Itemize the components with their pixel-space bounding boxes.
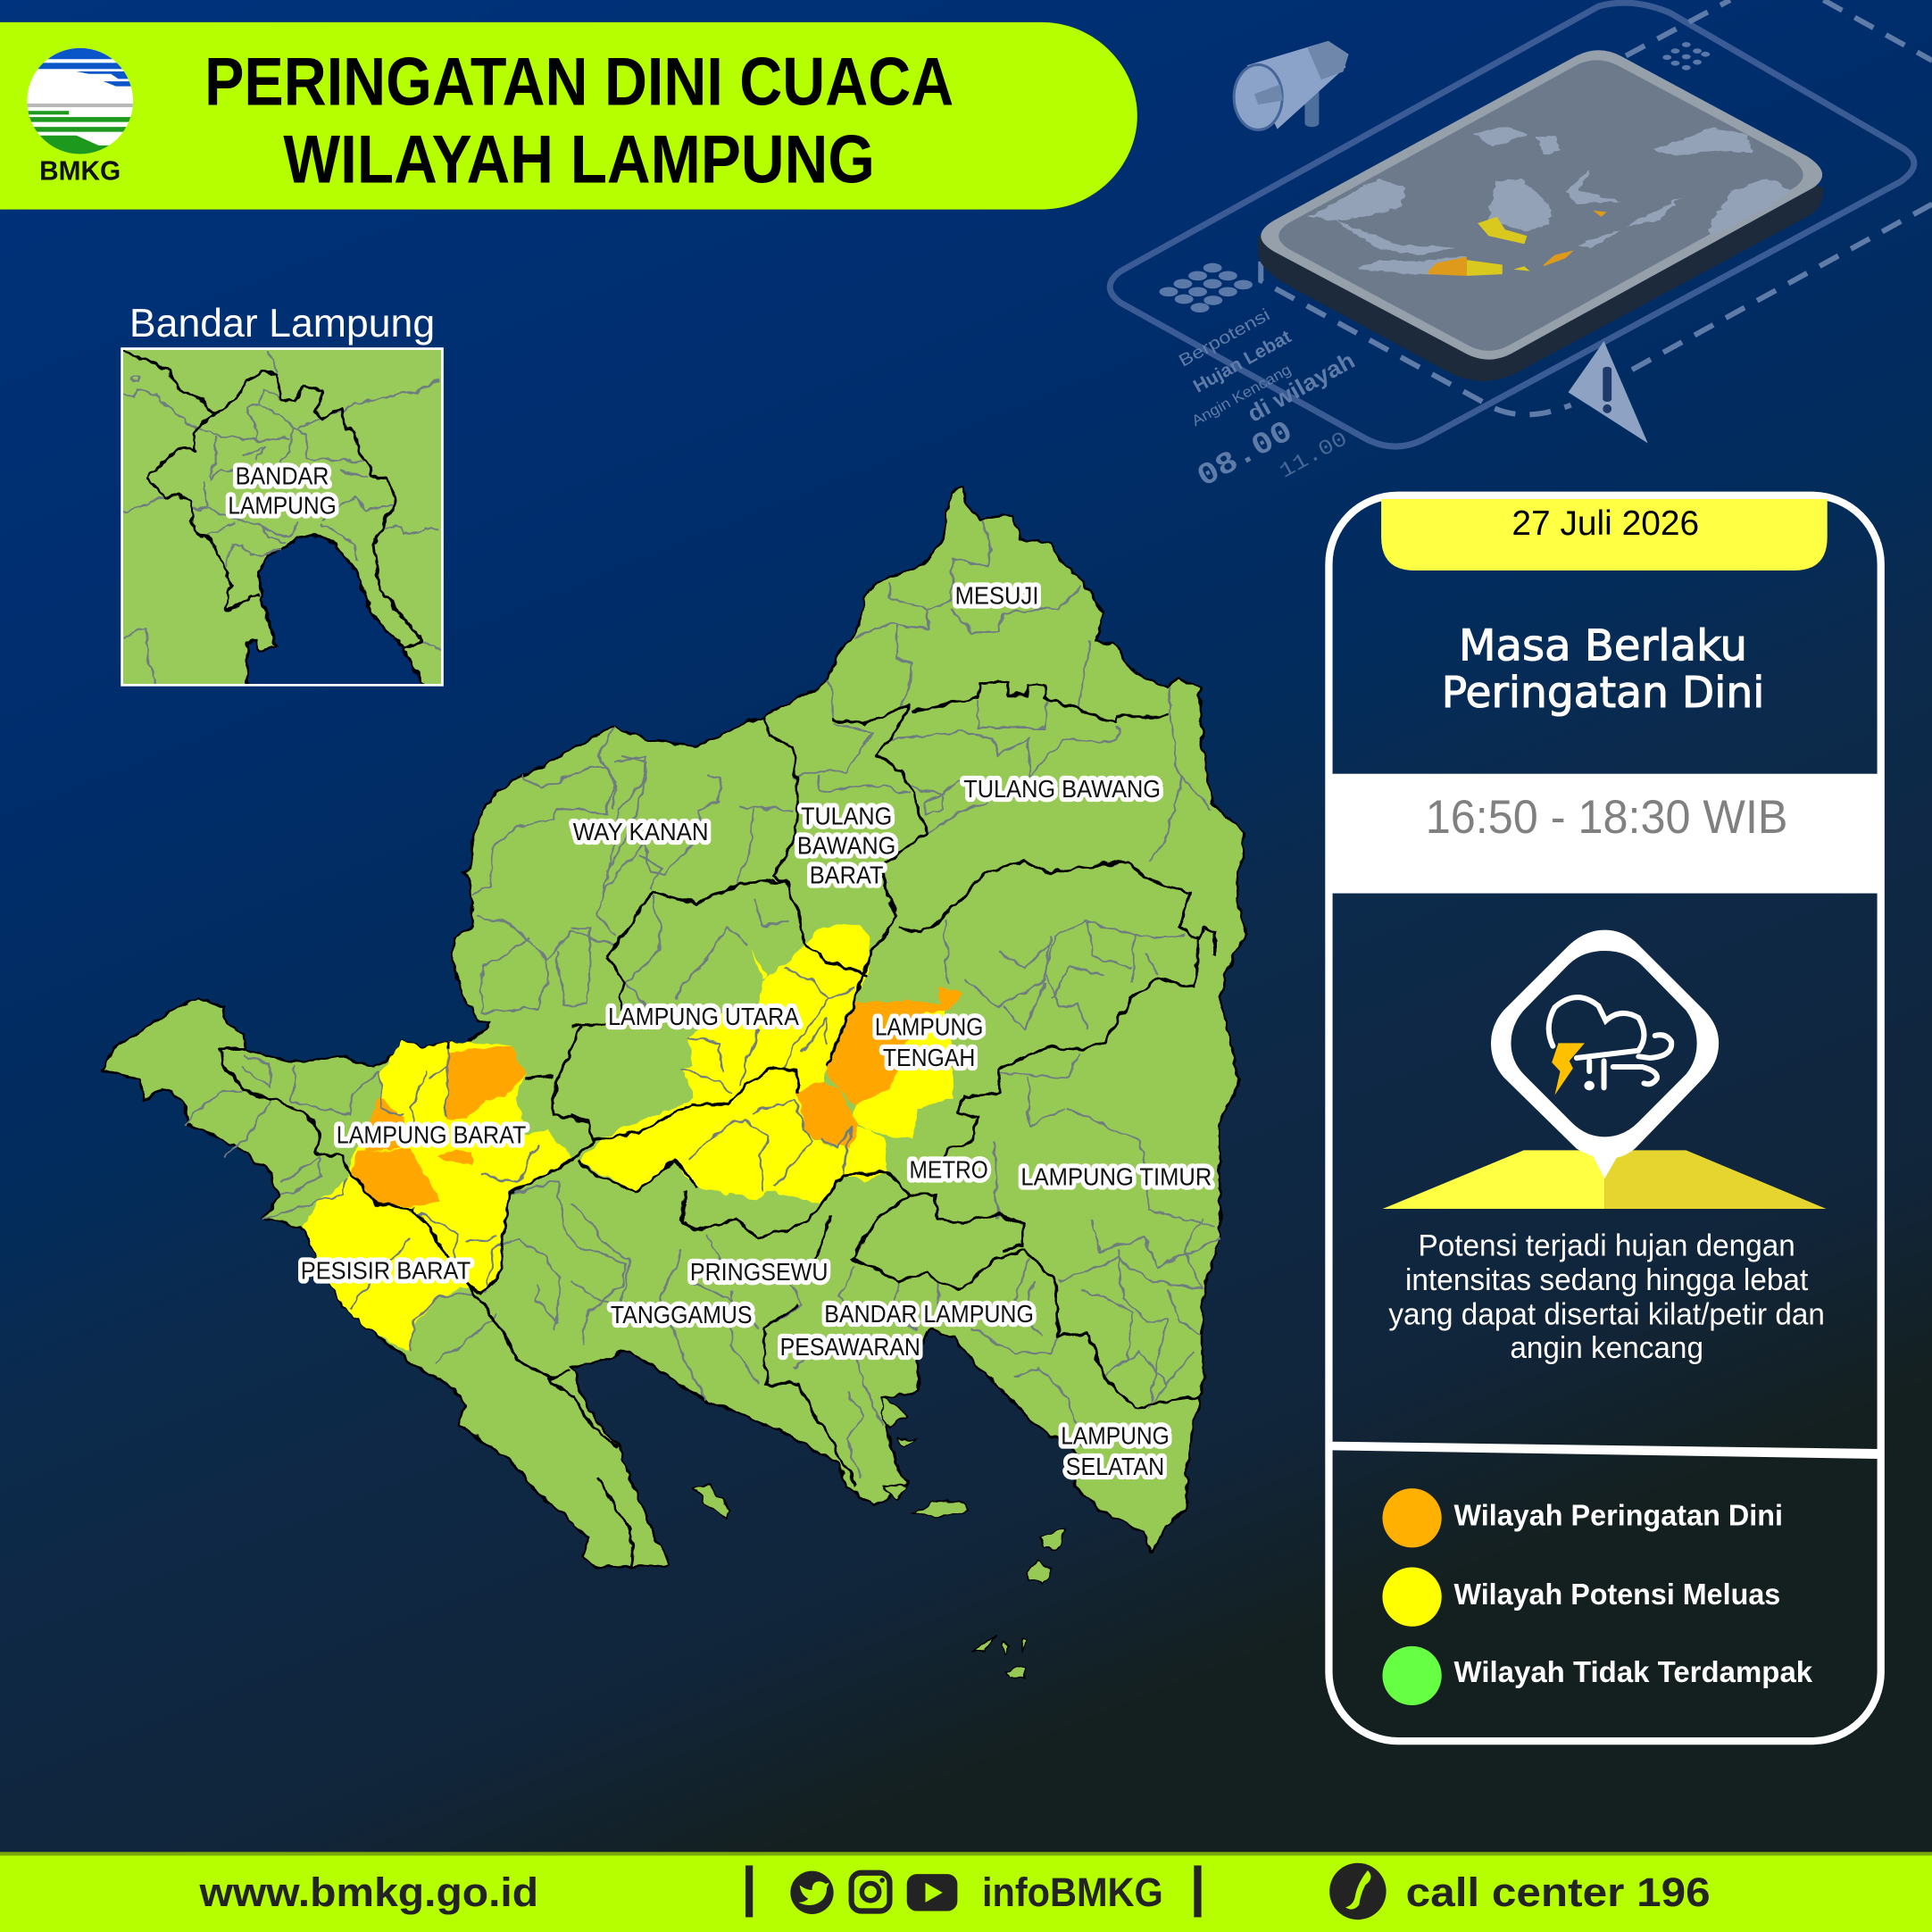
islands — [694, 1399, 1064, 1678]
icon: youtube — [907, 1874, 957, 1911]
inset sea — [245, 533, 425, 684]
validity heading: Masa Berlaku — [1459, 621, 1747, 671]
validity heading: Peringatan Dini — [1442, 668, 1764, 718]
social handle: infoBMKG — [982, 1870, 1163, 1915]
isometric background text: 11.00 — [1276, 428, 1352, 484]
isometric background text — [1176, 305, 1359, 495]
region labels: PESISIR BARAT — [301, 1257, 471, 1285]
region labels: LAMPUNG — [1061, 1421, 1170, 1449]
inset label: LAMPUNG — [228, 492, 337, 520]
sub-district lines east — [571, 520, 1220, 1486]
title: WILAYAH LAMPUNG — [283, 121, 875, 197]
region labels: LAMPUNG — [875, 1012, 983, 1040]
background illustration: tablet with map — [1110, 0, 1932, 446]
legend — [1382, 1488, 1813, 1705]
region labels: SELATAN — [1066, 1453, 1164, 1480]
map geography — [101, 487, 1247, 1678]
title: PERINGATAN DINI CUACA — [204, 44, 954, 120]
icon: weather pin on yellow base — [1383, 930, 1827, 1209]
dashed frame — [1261, 0, 1932, 414]
icon: phone — [1329, 1863, 1387, 1920]
icon: megaphone — [1234, 41, 1349, 129]
legend: Wilayah Peringatan Dini — [1454, 1500, 1783, 1533]
screen map highlighted areas — [1428, 211, 1607, 276]
region labels: TANGGAMUS — [611, 1301, 753, 1328]
region labels: PRINGSEWU — [690, 1258, 828, 1286]
logo: BMKG — [25, 46, 136, 186]
validity time band: 16:50 - 18:30 WIB — [1426, 792, 1788, 844]
description text: intensitas sedang hingga lebat — [1405, 1263, 1809, 1297]
tablet base — [1258, 96, 1824, 381]
region labels: METRO — [910, 1155, 988, 1183]
icon: warning triangle — [1569, 341, 1648, 443]
sub-district and regency lines west — [185, 756, 662, 1567]
title — [204, 44, 954, 197]
region labels: LAMPUNG BARAT — [337, 1121, 526, 1149]
description text — [1388, 1228, 1825, 1365]
inset label: BANDAR — [236, 462, 329, 489]
header banner — [0, 22, 1137, 210]
isometric background text: Berpotensi — [1176, 305, 1273, 371]
icon: instagram — [852, 1873, 889, 1911]
validity heading — [1442, 621, 1764, 718]
tablet frame — [1261, 50, 1822, 360]
dot grids — [1160, 42, 1710, 312]
region labels: BANDAR LAMPUNG — [824, 1300, 1034, 1328]
inset map: Bandar Lampung — [122, 349, 442, 712]
faint frame — [1110, 3, 1914, 446]
date tab: 27 Juli 2026 — [1511, 504, 1699, 543]
isometric background text: Angin Kencang — [1188, 361, 1294, 429]
validity time band — [1332, 774, 1878, 894]
warning zones — [304, 924, 964, 1353]
regency lines east — [571, 680, 1216, 1486]
icon: twitter — [790, 1871, 834, 1914]
footer bar — [0, 1852, 1932, 1932]
region labels: TENGAH — [883, 1044, 975, 1071]
logo: BMKG: BMKG — [39, 156, 121, 186]
description text: yang dapat disertai kilat/petir dan — [1388, 1298, 1825, 1332]
main map: Lampung province — [101, 487, 1247, 1678]
region labels — [301, 581, 1212, 1480]
region labels: MESUJI — [955, 581, 1038, 609]
region labels: LAMPUNG TIMUR — [1020, 1163, 1212, 1191]
region labels: TULANG — [801, 802, 892, 829]
legend: Wilayah Tidak Terdampak — [1454, 1656, 1813, 1689]
call center: call center 196 — [1406, 1870, 1711, 1915]
region labels: BAWANG — [797, 831, 895, 859]
region labels: TULANG BAWANG — [963, 775, 1161, 803]
region labels: PESAWARAN — [780, 1333, 920, 1361]
panel: warning info card — [1328, 495, 1881, 1741]
website: www.bmkg.go.id — [199, 1870, 538, 1915]
legend: Wilayah Potensi Meluas — [1454, 1578, 1780, 1611]
isometric background text: Hujan Lebat — [1190, 327, 1295, 397]
inset title: Bandar Lampung — [129, 302, 435, 346]
region labels: BARAT — [810, 862, 884, 889]
description text: angin kencang — [1510, 1331, 1703, 1365]
date tab — [1381, 499, 1828, 570]
isometric background text: di wilayah — [1243, 346, 1359, 428]
isometric background text: 08.00 — [1192, 414, 1299, 495]
region labels: LAMPUNG UTARA — [608, 1003, 800, 1030]
region labels: WAY KANAN — [573, 818, 709, 845]
screen map land — [1308, 126, 1791, 274]
tablet screen — [1278, 60, 1803, 351]
description text: Potensi terjadi hujan dengan — [1418, 1228, 1795, 1262]
inset label — [228, 462, 337, 520]
land outline — [101, 487, 1247, 1569]
